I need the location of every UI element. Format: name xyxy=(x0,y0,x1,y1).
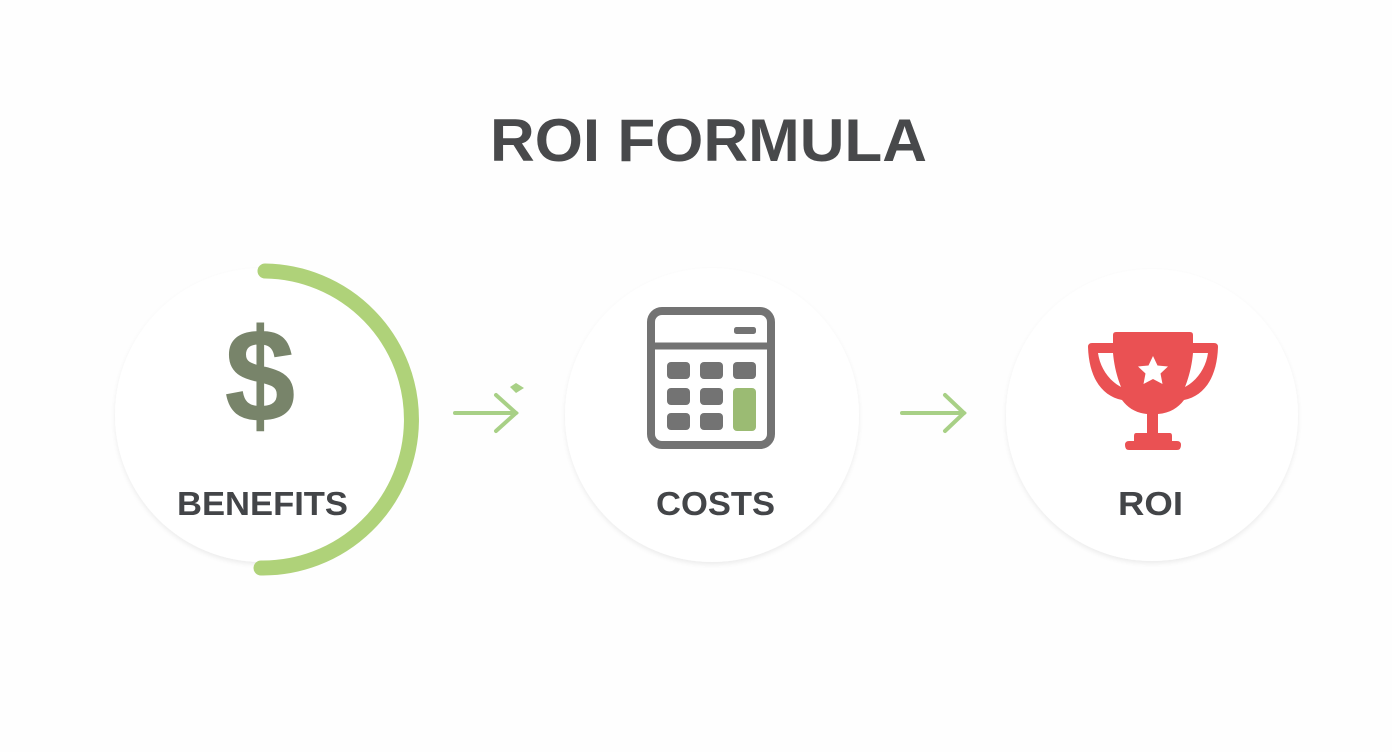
icon: dollar sign: $ xyxy=(225,302,295,449)
icon: calculator xyxy=(651,311,771,445)
panel: roi xyxy=(1006,269,1298,561)
star xyxy=(1138,356,1168,384)
icon: trophy xyxy=(1088,332,1218,450)
benefits arc xyxy=(261,271,411,568)
arrow: costs to roi xyxy=(902,395,964,431)
label: costs: COSTS xyxy=(656,485,775,522)
label: roi: ROI xyxy=(1118,485,1183,522)
panel: costs xyxy=(565,268,859,562)
arrow: benefits to costs xyxy=(455,383,524,431)
panel: benefits xyxy=(115,268,411,568)
title: ROI FORMULA xyxy=(490,107,927,174)
label: benefits: BENEFITS xyxy=(177,485,348,522)
